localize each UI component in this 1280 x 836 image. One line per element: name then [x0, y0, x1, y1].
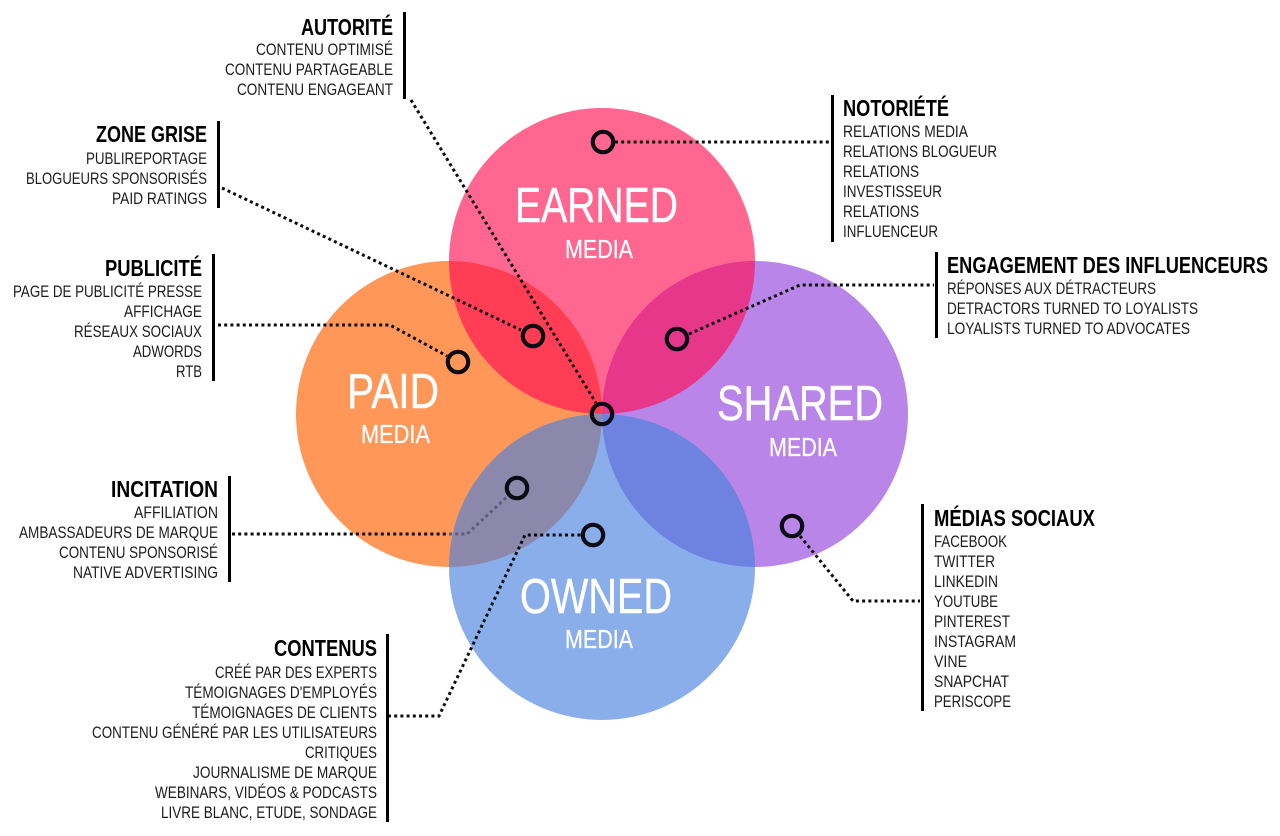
circle: shared [602, 261, 908, 567]
line: incitation [232, 496, 508, 534]
ring: publicité [448, 352, 468, 372]
text block: médias sociaux [921, 504, 1096, 711]
ring: autorité [592, 404, 612, 424]
text block: zone grise: PAID RATINGS [112, 190, 207, 208]
line: zone grise [222, 188, 521, 330]
line: notoriété [615, 140, 830, 144]
line: contenus [388, 535, 581, 716]
text block: notoriété [831, 94, 997, 242]
text block: engagement des influenceurs [935, 252, 1268, 338]
label: owned media: OWNED [520, 570, 672, 624]
text block: autorité: CONTENU ENGAGEANT [237, 81, 393, 99]
text block: contenus: TÉMOIGNAGES DE CLIENTS [192, 703, 377, 722]
line: engagement [689, 285, 934, 334]
circle: paid [296, 261, 602, 567]
label: shared media: SHARED [717, 377, 883, 431]
text block: incitation: AFFILIATION [134, 504, 218, 522]
ring: notoriété [593, 132, 613, 152]
overlap: shared and owned [602, 414, 755, 567]
text block: contenus: LIVRE BLANC, ETUDE, SONDAGE [161, 804, 377, 822]
text block: engagement des influenceurs: LOYALISTS TURNED TO ADVOCATES [947, 320, 1190, 338]
line: autorité [411, 100, 596, 403]
circle: owned [449, 414, 755, 720]
text block: notoriété: NOTORIÉTÉ [843, 94, 949, 121]
text block: publicité: PUBLICITÉ [105, 254, 202, 281]
text block: incitation: CONTENU SPONSORISÉ [59, 543, 218, 562]
text block: notoriété: RELATIONS [843, 203, 919, 221]
text block: zone grise [26, 121, 220, 208]
label: shared media: MEDIA [769, 432, 838, 462]
label: paid media: PAID [347, 365, 439, 419]
text block: zone grise: PUBLIREPORTAGE [86, 150, 207, 168]
text block: autorité: AUTORITÉ [301, 13, 393, 40]
ring: zone grise [523, 326, 543, 346]
text block: autorité: CONTENU PARTAGEABLE [225, 61, 393, 79]
text block: notoriété: RELATIONS BLOGUEUR [843, 143, 997, 161]
text block: publicité [13, 254, 215, 381]
label: earned media: EARNED [515, 179, 678, 233]
venn diagram [296, 108, 908, 720]
text block: publicité: RÉSEAUX SOCIAUX [74, 322, 202, 341]
label: paid media [347, 365, 439, 449]
text block: contenus [92, 634, 389, 822]
text block: notoriété: RELATIONS [843, 163, 919, 181]
ring: incitation [507, 478, 527, 498]
circle labels [347, 179, 883, 654]
text block: médias sociaux: PERISCOPE [934, 693, 1011, 711]
text block: contenus: CONTENU GÉNÉRÉ PAR LES UTILISATEURS [92, 723, 377, 742]
marker rings [448, 132, 802, 545]
text block: notoriété: RELATIONS MEDIA [843, 123, 968, 141]
text block: publicité: ADWORDS [133, 343, 202, 361]
text block: zone grise: ZONE GRISE [96, 121, 207, 147]
text block: médias sociaux: MÉDIAS SOCIAUX [934, 504, 1096, 531]
text block: contenus: CRITIQUES [305, 744, 377, 762]
text block: contenus: CONTENUS [274, 635, 377, 661]
label: shared media [717, 377, 883, 462]
label: earned media [515, 179, 678, 264]
label: paid media: MEDIA [361, 419, 431, 449]
line: publicité [218, 325, 447, 356]
text block: médias sociaux: PINTEREST [934, 613, 1010, 631]
text block: notoriété: INVESTISSEUR [843, 183, 942, 201]
text block: contenus: JOURNALISME DE MARQUE [193, 764, 377, 782]
text block: zone grise: BLOGUEURS SPONSORISÉS [26, 169, 207, 188]
ring: engagement [667, 329, 687, 349]
text block: médias sociaux: FACEBOOK [934, 533, 1007, 551]
text block: autorité [225, 12, 406, 99]
text block: publicité: RTB [176, 363, 202, 381]
label: earned media: MEDIA [565, 234, 634, 264]
text block: notoriété: INFLUENCEUR [843, 223, 938, 241]
text block: incitation: INCITATION [111, 476, 218, 502]
text block: médias sociaux: SNAPCHAT [934, 673, 1009, 691]
text block: contenus: CRÉÉ PAR DES EXPERTS [215, 663, 377, 682]
text block: incitation: AMBASSADEURS DE MARQUE [19, 524, 218, 542]
ring: contenus [583, 525, 603, 545]
label: owned media [520, 570, 672, 654]
text block: engagement des influenceurs: DETRACTORS TURNED TO LOYALISTS [947, 300, 1198, 318]
text block: publicité: PAGE DE PUBLICITÉ PRESSE [13, 282, 202, 301]
overlap: paid and owned [449, 414, 602, 567]
ring: médias sociaux [782, 516, 802, 536]
text block: médias sociaux: INSTAGRAM [934, 633, 1016, 651]
line: médias sociaux [800, 536, 920, 601]
connector lines [218, 100, 934, 716]
text block: incitation [19, 476, 231, 582]
overlap: earned and shared [602, 261, 755, 414]
text block: médias sociaux: VINE [934, 653, 967, 671]
text block: incitation: NATIVE ADVERTISING [73, 564, 218, 582]
text block: contenus: WEBINARS, VIDÉOS & PODCASTS [155, 783, 377, 802]
text block: médias sociaux: LINKEDIN [934, 573, 998, 591]
text block: contenus: TÉMOIGNAGES D'EMPLOYÉS [185, 683, 377, 702]
label: owned media: MEDIA [565, 624, 634, 654]
overlap: earned and paid [449, 261, 602, 414]
text block: médias sociaux: YOUTUBE [934, 593, 998, 611]
text block: médias sociaux: TWITTER [934, 553, 995, 571]
circle: earned [449, 108, 755, 414]
text block: autorité: CONTENU OPTIMISÉ [256, 40, 393, 59]
text block: engagement des influenceurs: RÉPONSES AUX DÉTRACTEURS [947, 279, 1156, 298]
text block: publicité: AFFICHAGE [124, 303, 202, 321]
